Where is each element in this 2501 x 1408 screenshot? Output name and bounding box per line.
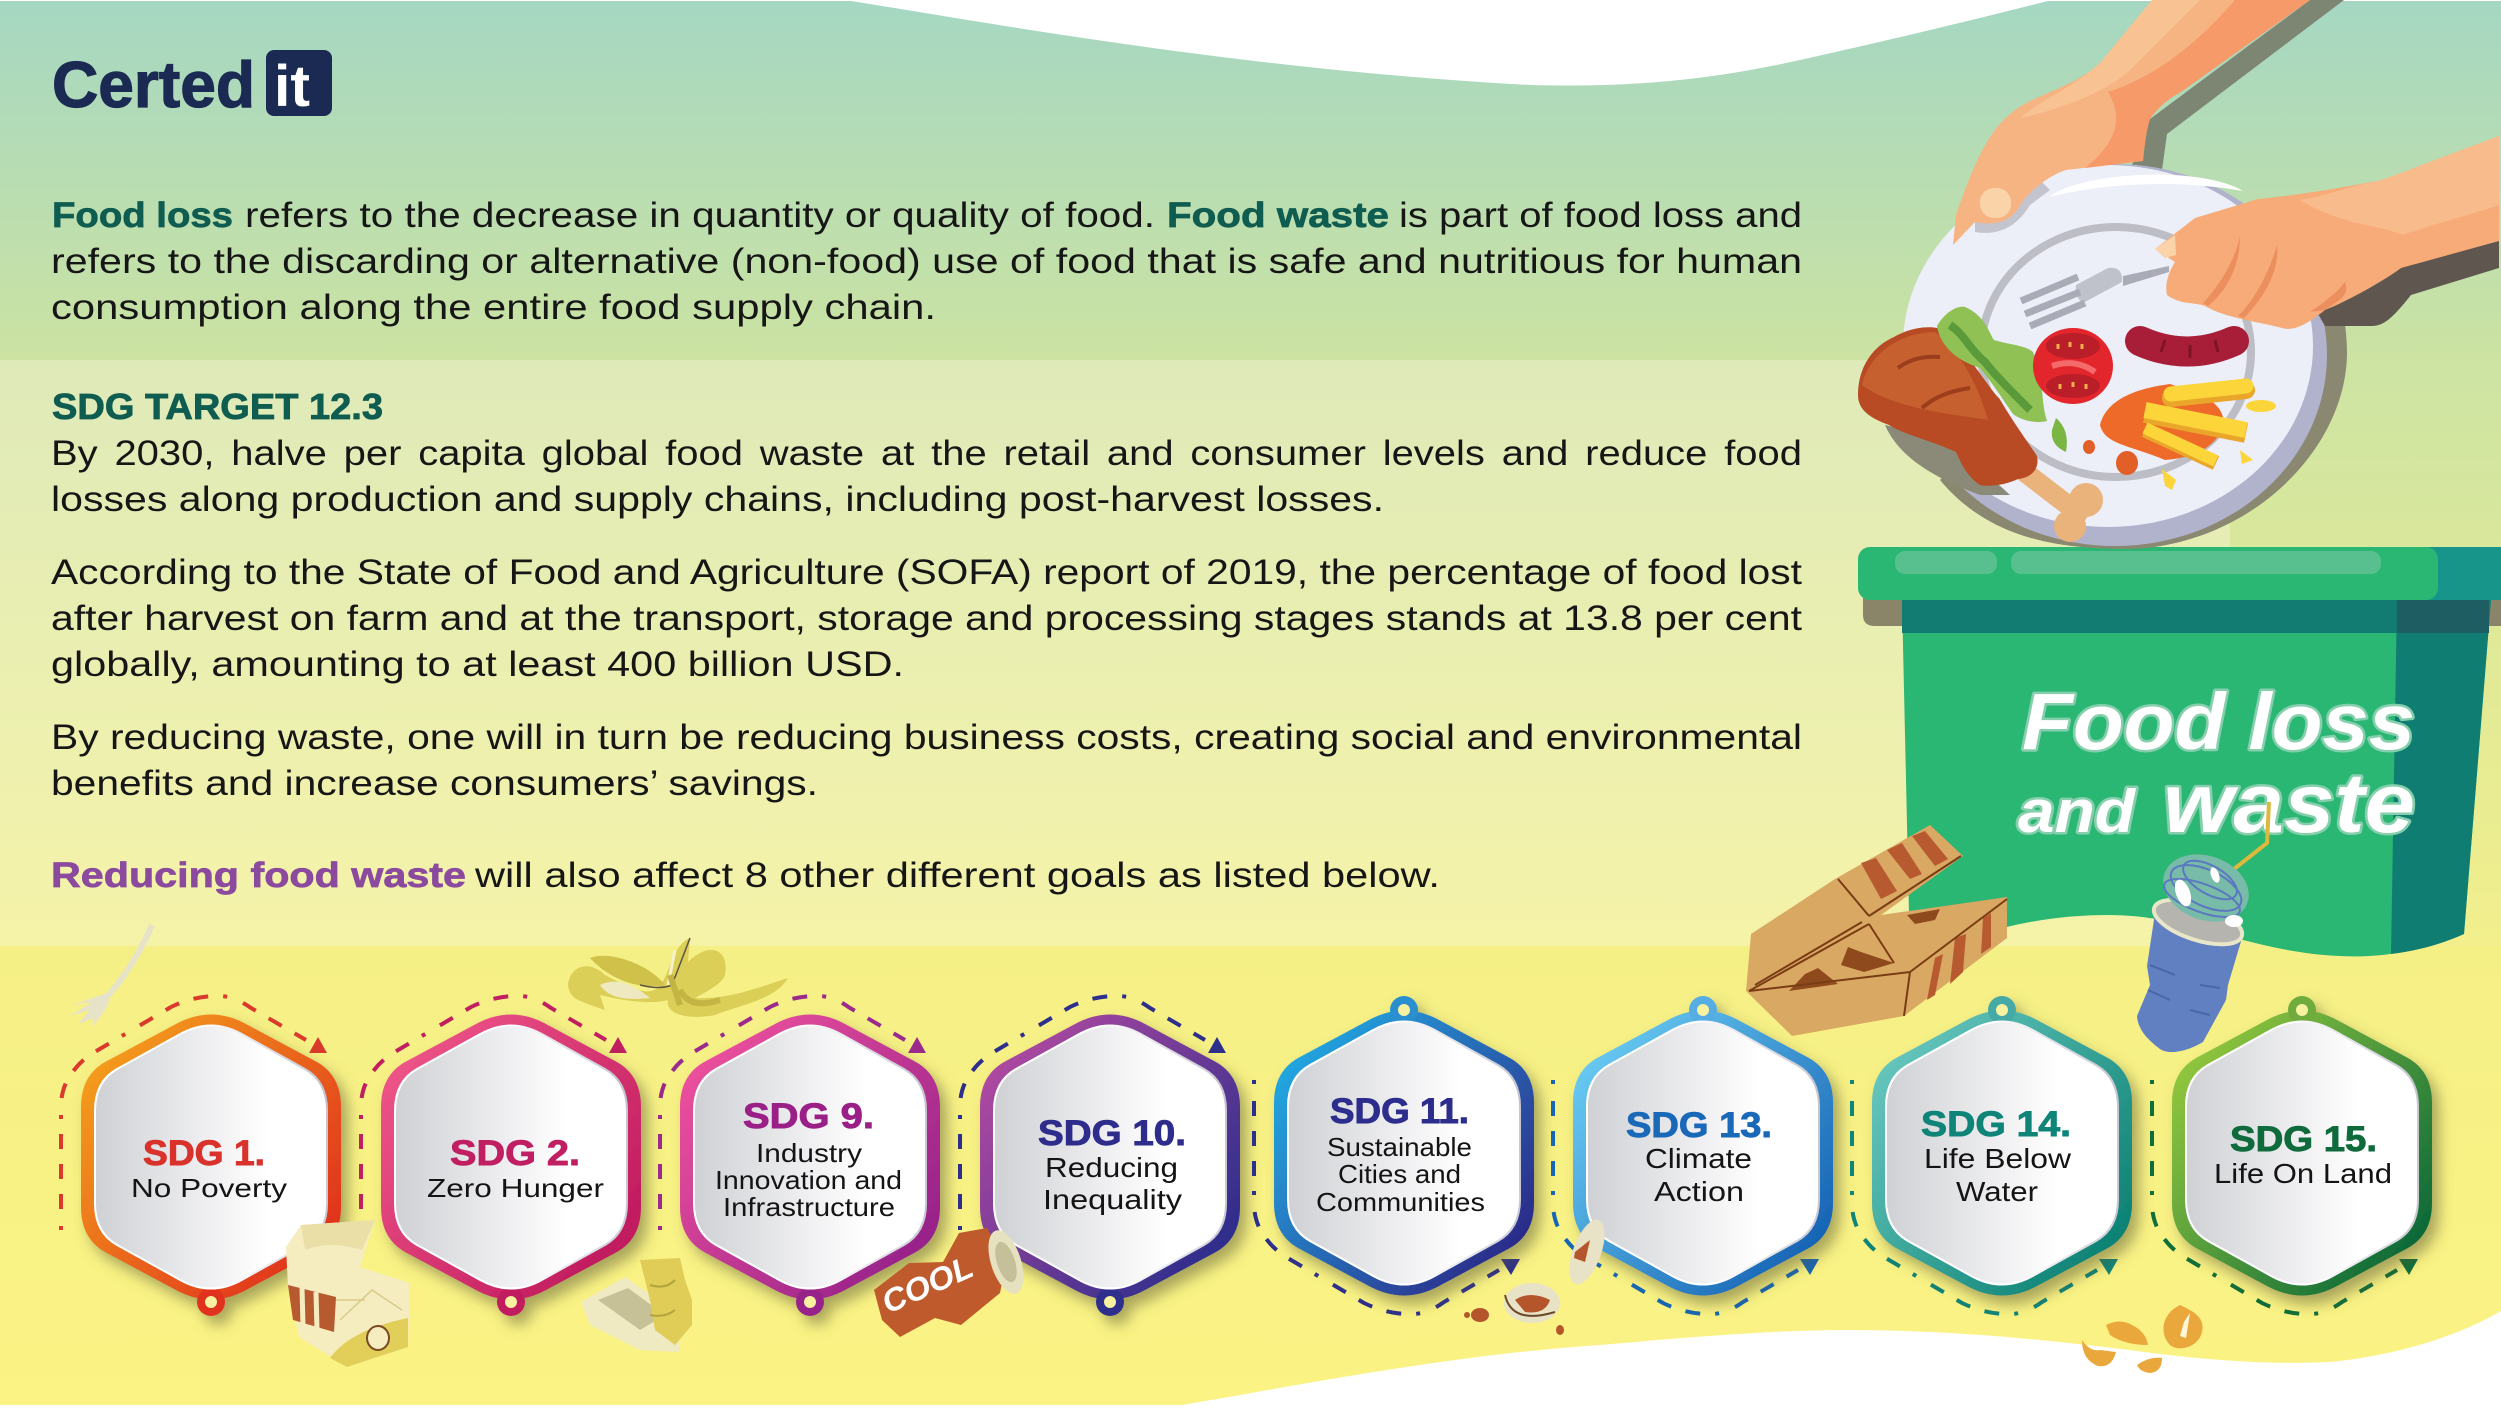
crushed soda can: COOL: [876, 1248, 979, 1320]
SDG target text block: [51, 434, 1802, 519]
bin collar: [1902, 600, 2397, 633]
SDG 10 card: [960, 996, 1240, 1316]
upper hand dark tone: [2085, 0, 2310, 168]
SDG 15 dashed arrow: [2152, 1080, 2397, 1314]
SDG 11 dashed arrow: [1254, 1080, 1499, 1314]
SDG 13 card: Climate: [1645, 1143, 1752, 1174]
takeaway box litter: [286, 1220, 410, 1367]
logo badge text: it: [274, 54, 310, 119]
SDG 15 hexagon: [2172, 996, 2432, 1296]
SDG 15 label: SDG 15.: [2230, 1120, 2377, 1159]
bin side shade: [2391, 600, 2491, 954]
SDG target text block: losses along production and supply chains, including post-harvest losses.: [51, 480, 1384, 519]
fork: [2021, 266, 2169, 326]
SDG 1 dashed arrow: [61, 996, 306, 1230]
business costs text block: benefits and increase consumers’ savings.: [51, 764, 818, 803]
pizza box: [1746, 825, 2007, 1036]
SDG 11 card: [1254, 996, 1534, 1314]
SOFA report text block: globally, amounting to at least 400 billion USD.: [51, 645, 904, 684]
definition text block: refers to the discarding or alternative (non-food) use of food that is safe and nutritious for human: [51, 242, 1802, 281]
SDG 10 card: Inequality: [1043, 1184, 1182, 1215]
plate inner ring: [1981, 227, 2251, 477]
SDG 2 label: SDG 2.: [450, 1134, 580, 1173]
SDG 14 hexagon: [1872, 996, 2132, 1296]
SDG 13 card: Action: [1654, 1176, 1744, 1207]
bin collar side: [2397, 600, 2489, 633]
upper hand highlight: [2020, 0, 2200, 118]
ketchup and fries: [2052, 384, 2276, 490]
background: lower yellow band: [0, 946, 2501, 1405]
plate top: [1903, 165, 2313, 527]
background: middle pale text panel: [0, 360, 2230, 947]
SOFA report text block: [51, 553, 1802, 684]
right hand: [2155, 136, 2499, 329]
background: top white wave: [845, 0, 2052, 86]
SDG target text block: By 2030, halve per capita global food waste at the retail and consumer levels and reduce food: [51, 434, 1802, 473]
logo wordmark: Certed: [52, 48, 255, 121]
SDG 1 label: SDG 1.: [143, 1134, 265, 1173]
bin title: [2018, 677, 2415, 850]
food tray litter: [581, 1258, 692, 1352]
background: bottom white wave: [1182, 1311, 2501, 1408]
definition text block: is part of food loss and: [1399, 196, 1802, 235]
SDG 2 card: [361, 996, 641, 1316]
drumstick creases: [1898, 357, 1970, 408]
background: top green band: [0, 1, 2501, 361]
upper hand thumbnail: [1980, 188, 2011, 218]
SDG 13 label: SDG 13.: [1626, 1106, 1772, 1145]
SDG 9 label: SDG 9.: [743, 1097, 874, 1136]
SOFA report text block: According to the State of Food and Agriculture (SOFA) report of 2019, the percentage of food lost: [51, 553, 1802, 592]
SDG 9 card: Industry: [756, 1138, 862, 1168]
business costs text block: [51, 718, 1802, 803]
thumb shadow on plate: [1975, 180, 2050, 233]
food crumbs litter: [2082, 1305, 2203, 1373]
bin title: Food loss: [2022, 677, 2415, 766]
SDG 11 card: Cities and: [1338, 1159, 1461, 1189]
SDG target heading: SDG TARGET 12.3: [52, 386, 383, 427]
logo badge: [266, 50, 332, 116]
SDG 11 label: SDG 11.: [1330, 1092, 1469, 1131]
bin lid: [1858, 547, 2438, 600]
definition text block: refers to the decrease in quantity or quality of food.: [245, 196, 1155, 235]
drumstick meat: [1858, 327, 2038, 486]
definition text block: [51, 196, 1802, 327]
waste bin: [1858, 547, 2501, 960]
SDG 15 card: [2152, 996, 2432, 1314]
goals lead-in text: [51, 856, 1440, 895]
broken dish litter: [1464, 1215, 1612, 1335]
lettuce: [1937, 307, 2047, 422]
SDG 14 label: SDG 14.: [1921, 1105, 2071, 1144]
SDG 1 card: No Poverty: [131, 1173, 287, 1203]
SDG 1 hexagon: [81, 1014, 341, 1316]
background: right column behind bin: [2230, 360, 2501, 950]
SDG 2 card: Zero Hunger: [427, 1173, 604, 1203]
SDG 13 dashed arrow: [1553, 1080, 1798, 1314]
bin title: and: [2018, 778, 2136, 845]
SDG 11 card: Sustainable: [1327, 1132, 1472, 1162]
SOFA report text block: after harvest on farm and at the transport, storage and processing stages stands at 13.8 per cent: [51, 599, 1802, 638]
SDG 10 label: SDG 10.: [1038, 1114, 1186, 1153]
bin lid highlights: [1895, 551, 1997, 574]
SDG 9 dashed arrow: [660, 996, 905, 1230]
right hand shadow: [2310, 240, 2499, 326]
right hand thumbnail: [2155, 235, 2176, 258]
sausage: [2140, 340, 2234, 358]
definition text block: Food loss: [52, 196, 233, 235]
drumstick shadow: [1885, 425, 2010, 495]
definition text block: consumption along the entire food supply chain.: [51, 288, 936, 327]
upper hand shadow: [2130, 0, 2344, 170]
bin lid side: [2300, 547, 2501, 600]
logo: [52, 48, 332, 121]
SDG 10 hexagon: [980, 1014, 1240, 1316]
SDG 1 card: [61, 996, 341, 1316]
goals lead-in text: will also affect 8 other different goals as listed below.: [474, 856, 1440, 895]
plastic fork litter: [70, 925, 152, 1026]
plate with leftover food held by hands: [1858, 0, 2499, 549]
SDG 14 card: Life Below: [1924, 1143, 2072, 1174]
SDG 9 hexagon: [680, 1014, 940, 1316]
SDG 9 card: Infrastructure: [723, 1192, 895, 1222]
plate highlight: [2049, 175, 2243, 197]
crushed plastic cup: [2137, 802, 2269, 1052]
business costs text block: By reducing waste, one will in turn be reducing business costs, creating social and environmental: [51, 718, 1802, 757]
goals lead-in text: Reducing food waste: [51, 856, 466, 895]
SDG 9 card: Innovation and: [715, 1165, 902, 1195]
plate shadow: [1940, 220, 2347, 549]
bin title: waste: [2163, 756, 2415, 850]
bin body: [1902, 600, 2491, 960]
SDG 10 card: Reducing: [1045, 1152, 1178, 1183]
SDG 13 card: [1553, 996, 1833, 1314]
right hand highlight: [2300, 136, 2499, 235]
SDG 2 dashed arrow: [361, 996, 606, 1230]
right hand finger shading: [2203, 236, 2346, 318]
bin lid shadow: [1863, 598, 2501, 626]
SDG 11 hexagon: [1274, 996, 1534, 1296]
plate rim: [1903, 164, 2327, 546]
SDG 15 card: Life On Land: [2214, 1158, 2392, 1189]
upper hand: [1953, 0, 2310, 245]
SDG 2 hexagon: [381, 1014, 641, 1316]
SDG 13 hexagon: [1573, 996, 1833, 1296]
banana peel litter: [568, 938, 788, 1017]
SDG 14 card: Water: [1956, 1176, 2038, 1207]
SDG 11 card: Communities: [1316, 1187, 1485, 1217]
definition text block: Food waste: [1167, 196, 1389, 235]
drumstick light tone: [1862, 332, 1988, 420]
drumstick bone: [2009, 460, 2103, 542]
tomato: [2033, 328, 2113, 404]
lettuce shade: [1950, 325, 2030, 410]
SDG 10 dashed arrow: [960, 996, 1205, 1230]
SDG 14 card: [1852, 996, 2132, 1314]
crushed soda can: [874, 1226, 1030, 1337]
SDG 14 dashed arrow: [1852, 1080, 2097, 1314]
SDG 9 card: [660, 996, 940, 1316]
